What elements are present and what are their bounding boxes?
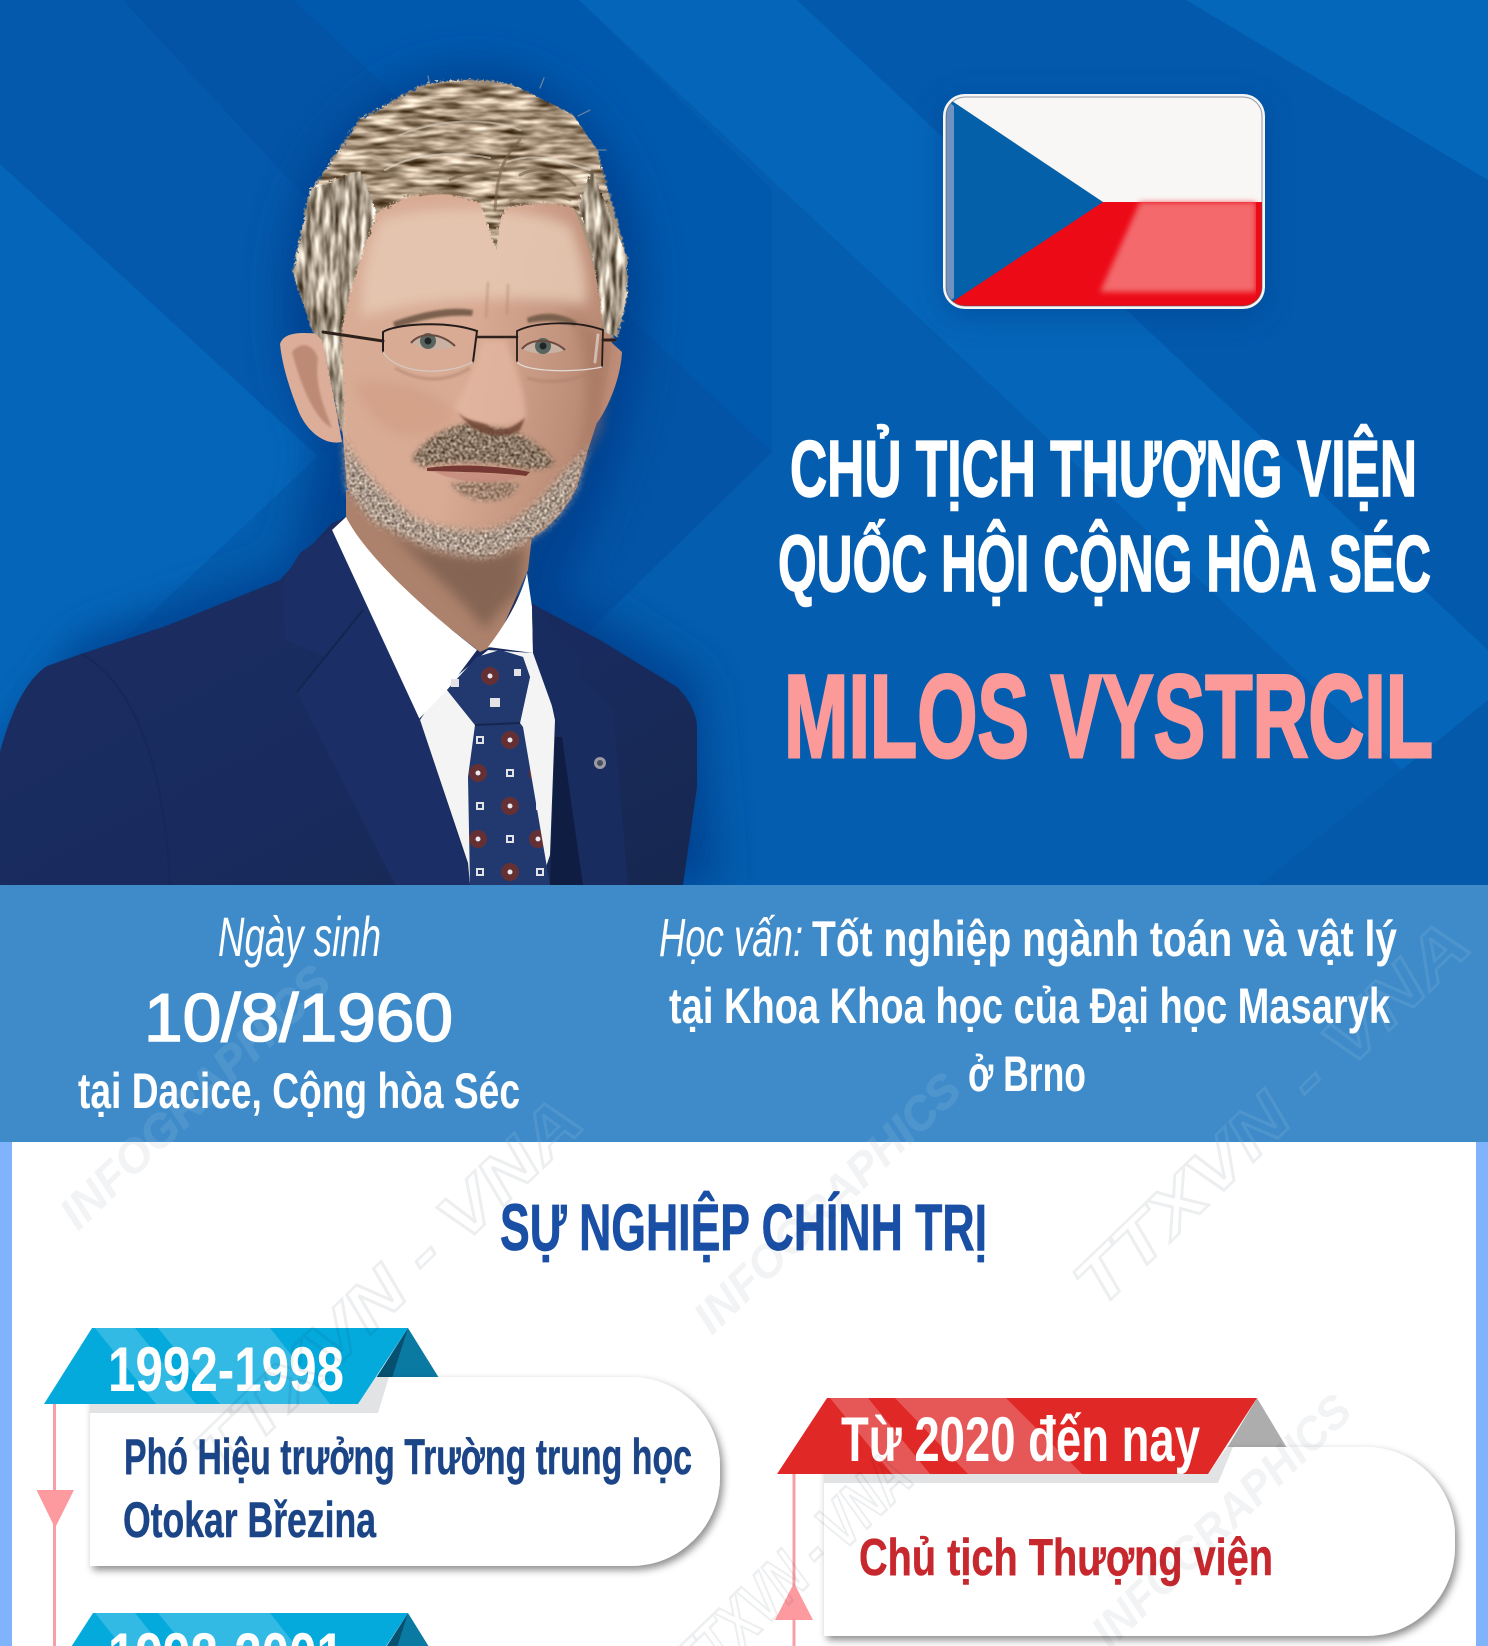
right timeline line and arrow <box>775 1474 813 1646</box>
birth date block <box>78 905 520 1119</box>
description: Phó Hiệu trưởng Trường trung học <box>124 1429 692 1485</box>
watermarks on white area: TTXVN - VNA <box>178 1083 597 1490</box>
birth date block: 10/8/1960 <box>144 980 453 1056</box>
hair highlights <box>385 76 606 210</box>
icon: Czech flag <box>943 94 1265 316</box>
shirt collar right <box>488 573 533 653</box>
education block: Học vấn: <box>659 908 803 968</box>
card <box>824 1447 1455 1636</box>
watermarks on blue band: TTXVN - VNA <box>178 1083 597 1490</box>
left timeline line and arrow <box>36 1404 74 1646</box>
watermarks on blue band: INFOGRAPHICS <box>683 1062 971 1343</box>
panel: political career white area <box>0 1142 1488 1646</box>
nose <box>455 340 526 425</box>
education block <box>659 908 1397 1102</box>
shirt <box>420 650 555 885</box>
watermarks on white area: TTXVN - VNA <box>1058 906 1484 1320</box>
timeline entry 1992-1998: 1992-1998 <box>108 1335 344 1405</box>
panel: blue hero background <box>0 0 1488 885</box>
hair top <box>310 80 610 250</box>
hair right side <box>578 170 627 337</box>
tie <box>447 650 550 885</box>
card <box>90 1377 720 1566</box>
watermarks on white area: INFOGRAPHICS <box>683 1062 971 1343</box>
hair underlay <box>293 80 627 430</box>
glasses <box>323 323 615 371</box>
year tag <box>40 1328 410 1404</box>
neck <box>346 490 535 652</box>
chin tuft <box>450 481 520 501</box>
vest <box>550 737 583 885</box>
timeline entry 1992-1998 <box>40 1328 720 1566</box>
education block: ở Brno <box>968 1046 1086 1102</box>
description: Chủ tịch Thượng viện <box>859 1529 1273 1587</box>
right lapel <box>532 603 628 885</box>
year tag <box>770 1398 1260 1474</box>
panel: personal information band <box>0 885 1488 1142</box>
timeline entry 1998-2001 <box>72 1613 428 1646</box>
face <box>338 190 612 555</box>
birth date block: tại Dacice, Cộng hòa Séc <box>78 1063 520 1119</box>
watermarks on white area <box>61 1142 1349 1646</box>
left lapel <box>283 530 470 885</box>
hair left side <box>293 170 377 435</box>
jacket <box>0 517 697 885</box>
folded tag corner <box>376 1328 439 1378</box>
birth date block: Ngày sinh <box>218 905 381 968</box>
mouth <box>427 465 530 476</box>
timeline entry from 2020 to present: Từ 2020 đến nay <box>841 1405 1200 1475</box>
right ear <box>597 343 622 423</box>
folded tag corner <box>1227 1398 1287 1448</box>
beard stubble <box>343 437 588 558</box>
heading: political career: SỰ NGHIỆP CHÍNH TRỊ <box>500 1190 987 1264</box>
watermarks on blue band: TTXVN - VNA <box>1058 906 1484 1320</box>
watermarks on blue band: INFOGRAPHICS <box>49 955 341 1239</box>
left ear <box>280 333 342 443</box>
description <box>123 1429 692 1548</box>
description: Otokar Březina <box>123 1492 377 1548</box>
watermarks on blue band <box>124 926 1472 1142</box>
timeline entry from 2020 to present <box>770 1398 1455 1636</box>
dark halo behind portrait <box>0 68 716 885</box>
eyes and eyebrows <box>412 336 454 350</box>
moustache <box>412 423 555 469</box>
shirt collar left <box>332 517 477 720</box>
title <box>778 424 1431 608</box>
watermarks on white area: INFOGRAPHICS <box>49 955 341 1239</box>
photo: portrait of Milos Vystrcil <box>0 68 716 885</box>
